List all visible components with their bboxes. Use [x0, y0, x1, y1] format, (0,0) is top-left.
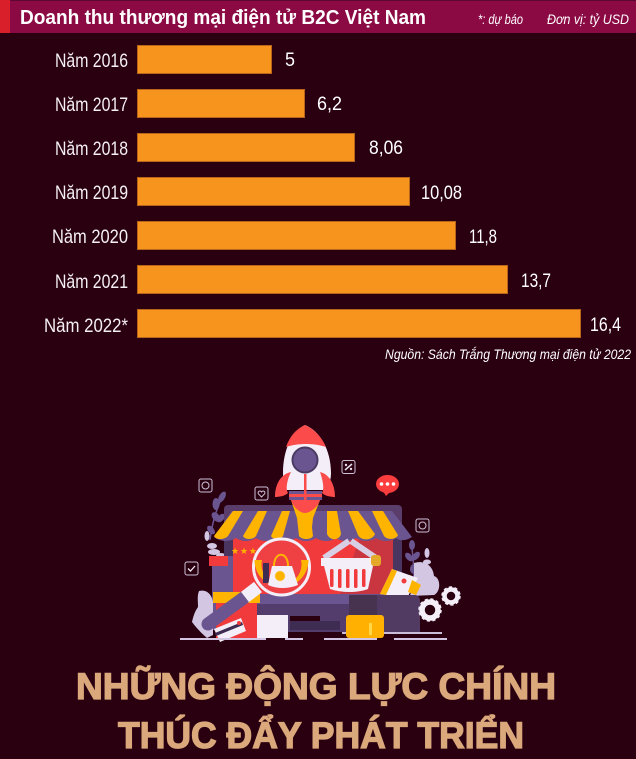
- row 2022: Năm 2022*: [44, 315, 128, 337]
- icon: heart tag: [255, 487, 268, 500]
- row 2020: 11,8: [469, 226, 497, 248]
- main heading: [76, 665, 556, 756]
- icon: currency tag left: [199, 479, 212, 492]
- unit note: Đơn vị: tỷ USD: [547, 12, 629, 27]
- illustration: online shop: [180, 425, 460, 642]
- icon: currency tag right: [416, 519, 429, 532]
- forecast note: *: dự báo: [478, 12, 523, 27]
- row 2016: 5: [285, 49, 295, 71]
- gift boxes and card: [213, 592, 288, 642]
- header bar: [0, 0, 636, 33]
- heading line 2: THÚC ĐẨY PHÁT TRIỂN: [118, 714, 524, 756]
- row 2022: 16,4: [590, 314, 621, 336]
- row 2017: 6,2: [317, 93, 342, 115]
- row 2019: Năm 2019: [55, 182, 128, 204]
- icon: percent tag: [342, 460, 355, 474]
- row 2017: [55, 90, 342, 118]
- leafy bush left: [192, 591, 213, 638]
- heading line 1: NHỮNG ĐỘNG LỰC CHÍNH: [76, 665, 556, 707]
- credit card and bush right: [380, 562, 439, 598]
- row 2021: 13,7: [521, 270, 551, 292]
- icon: gears: [420, 588, 460, 620]
- row 2021: Năm 2021: [55, 271, 128, 293]
- row 2019: [55, 178, 462, 206]
- shop frame: [209, 505, 420, 632]
- row 2016: [55, 46, 295, 74]
- row 2021: [55, 266, 551, 294]
- row 2016: Năm 2016: [55, 50, 128, 72]
- row 2018: 8,06: [369, 137, 403, 159]
- bar chart: [44, 46, 621, 338]
- row 2019: 10,08: [421, 182, 462, 204]
- shopping basket: [321, 541, 381, 592]
- magnifier: [208, 539, 310, 624]
- icon: check box: [185, 562, 198, 575]
- awning: [214, 511, 412, 541]
- row 2018: Năm 2018: [55, 138, 128, 160]
- row 2022: [44, 310, 621, 338]
- row 2020: [52, 222, 497, 250]
- row 2018: [55, 134, 403, 162]
- chart title: Doanh thu thương mại điện tử B2C Việt Nam: [20, 7, 426, 29]
- icon: rocket: [275, 425, 335, 536]
- briefcase: [342, 595, 442, 638]
- ground lines: [180, 638, 447, 640]
- rating stars: ★★★: [231, 546, 257, 556]
- icon: chat bubble: [376, 475, 399, 496]
- plants left and right: [204, 490, 431, 578]
- row 2017: Năm 2017: [55, 94, 128, 116]
- row 2020: Năm 2020: [52, 226, 128, 248]
